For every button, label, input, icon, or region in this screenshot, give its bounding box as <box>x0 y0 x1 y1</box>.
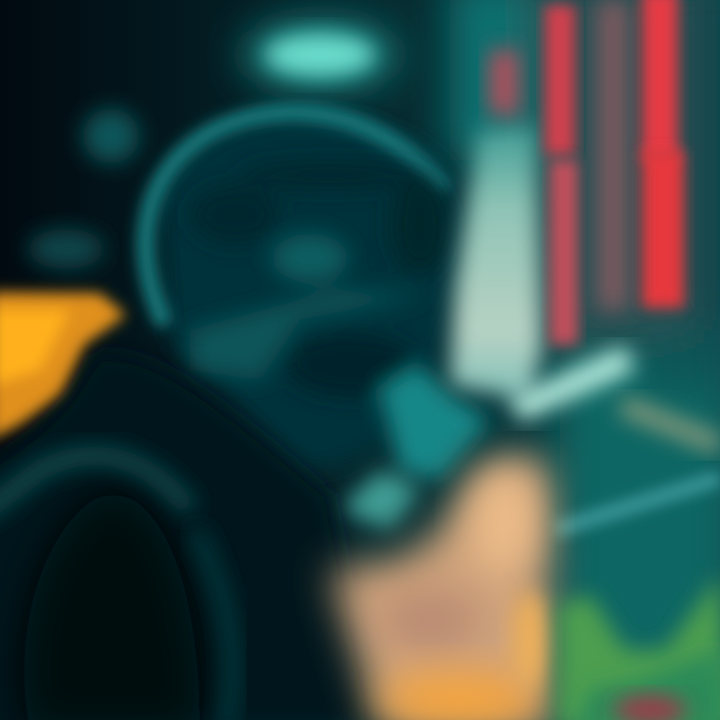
icon: glowing halo ellipse <box>242 19 398 91</box>
chart: bright trend line <box>515 358 630 410</box>
shoulder silhouette <box>0 354 375 720</box>
icon: small teal glow <box>83 109 139 163</box>
chart: tan trend line <box>622 405 720 445</box>
chart: red candlesticks <box>490 0 684 345</box>
panel: right chart backdrop <box>450 0 720 720</box>
area chart: peach mountain <box>330 455 552 720</box>
icon: low teal glow <box>28 229 104 269</box>
chart: teal trend line <box>555 478 720 530</box>
orange bowl shape <box>0 292 126 440</box>
head outline ring <box>146 112 445 325</box>
face highlights <box>190 161 490 530</box>
head silhouette <box>146 112 490 530</box>
area chart: green mountain <box>558 575 720 720</box>
chart: pale column <box>450 125 542 400</box>
